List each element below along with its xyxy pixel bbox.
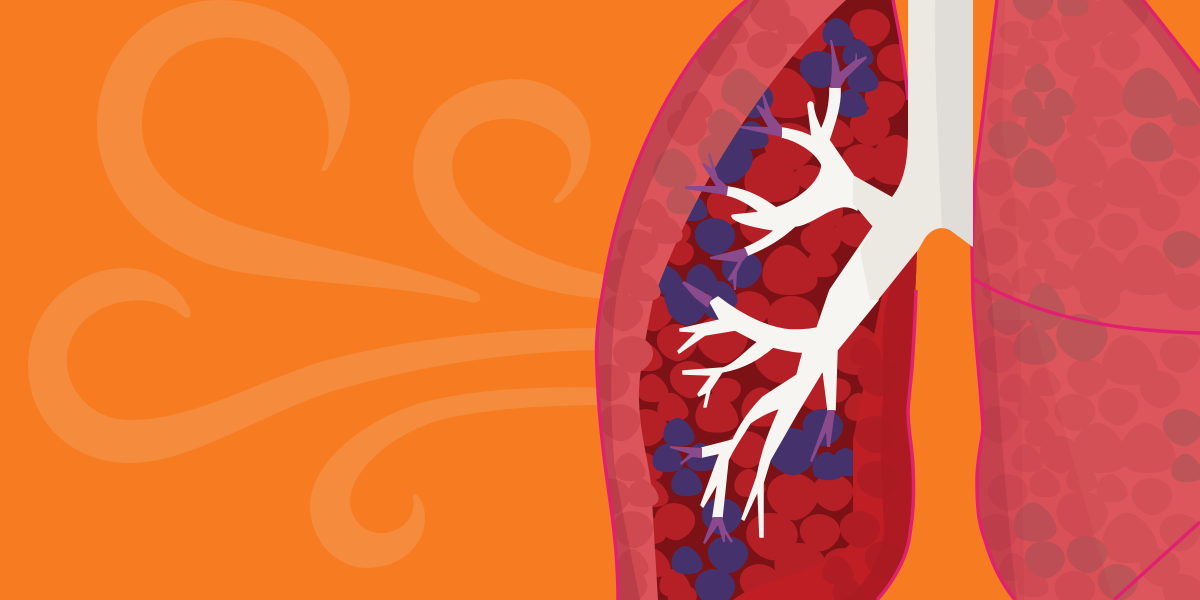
trachea: main tube — [853, 0, 973, 300]
bronchiole tips: purple — [670, 40, 867, 544]
right lung — [960, 0, 1200, 600]
alveoli: red — [627, 9, 926, 600]
medial dark band — [860, 252, 917, 600]
band grey tissue — [653, 68, 773, 214]
alveoli: purple — [652, 18, 879, 600]
trachea: shaded side — [935, 0, 973, 247]
medial zone alveoli — [822, 342, 884, 600]
left lung outline — [597, 0, 916, 600]
band tissue — [590, 0, 809, 600]
swirl: upper middle — [413, 79, 610, 299]
right lung grey tissue — [988, 0, 1200, 600]
trachea — [853, 0, 973, 300]
lung interior — [638, 0, 917, 600]
wind swirls — [28, 0, 610, 568]
right lung tissue — [975, 0, 1200, 600]
right lung outline and fissures — [972, 0, 1200, 600]
right lung fill — [960, 0, 1200, 600]
left lung — [590, 0, 930, 600]
right lung lower shaded wedge — [960, 320, 1113, 600]
swirl: left — [28, 268, 610, 463]
lower lobe branches — [678, 227, 878, 537]
right lung medial dark wedge — [974, 184, 1017, 600]
swirl: top — [97, 0, 480, 303]
upper lobe branches — [727, 88, 857, 255]
medial bright zone — [733, 252, 917, 600]
right lung upper dark band — [1122, 0, 1200, 106]
right lung medial light band — [960, 0, 1024, 600]
swirl: bottom — [310, 387, 610, 568]
band dark edge — [593, 0, 760, 600]
outer pleural band — [590, 0, 846, 600]
bronchial tree: white branches — [678, 88, 878, 537]
